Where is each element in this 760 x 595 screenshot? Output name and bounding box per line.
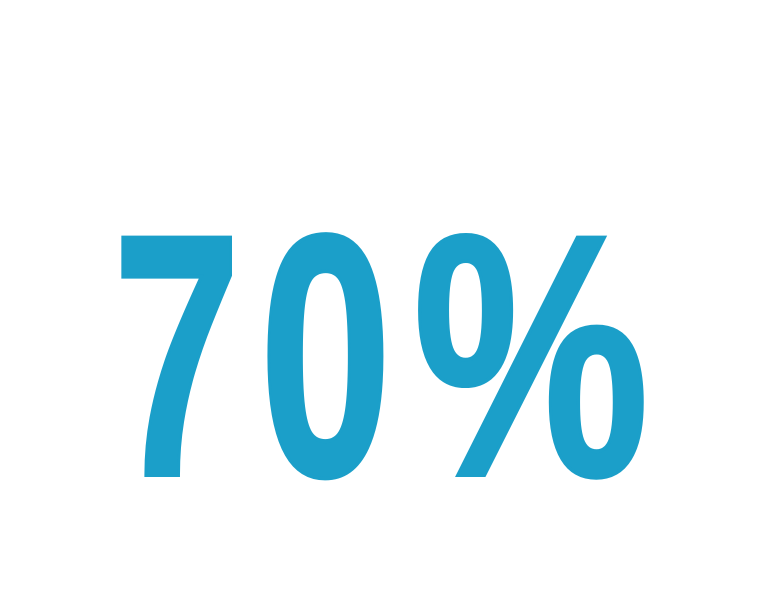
statistic: 70%: 0 [259,163,392,548]
statistic: 70%: 7 [113,164,241,549]
statistic: 70%: % [413,163,649,549]
statistic: 70% [113,163,649,549]
